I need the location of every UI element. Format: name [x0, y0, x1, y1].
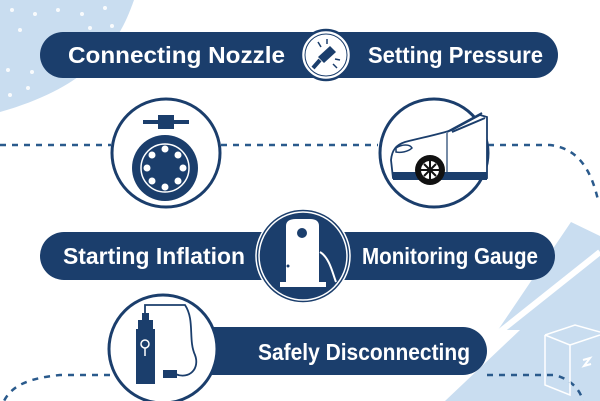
pill: starting inflation / monitoring gauge: Starting Inflation: [63, 243, 245, 269]
icon: car circle: [380, 99, 488, 207]
pill: connecting nozzle / setting pressure: [40, 32, 558, 78]
background shape bottom-right: [445, 222, 600, 401]
pill: safely disconnecting: [160, 327, 487, 375]
background blob top-left: [0, 0, 134, 112]
dashed path: [0, 145, 598, 401]
pill: starting inflation / monitoring gauge: Monitoring Gauge: [362, 243, 538, 269]
pill: starting inflation / monitoring gauge: [40, 232, 555, 280]
pill: connecting nozzle / setting pressure: Connecting Nozzle: [68, 42, 285, 68]
icon: nozzle: [301, 30, 351, 80]
icon: pump cylinder: [109, 295, 217, 401]
icon: wheel circle: [112, 99, 220, 207]
pill: safely disconnecting: Safely Disconnecting: [258, 339, 470, 365]
icon: air pump station: [256, 209, 350, 303]
pill: connecting nozzle / setting pressure: Setting Pressure: [368, 42, 543, 68]
icon: box: [545, 325, 600, 395]
